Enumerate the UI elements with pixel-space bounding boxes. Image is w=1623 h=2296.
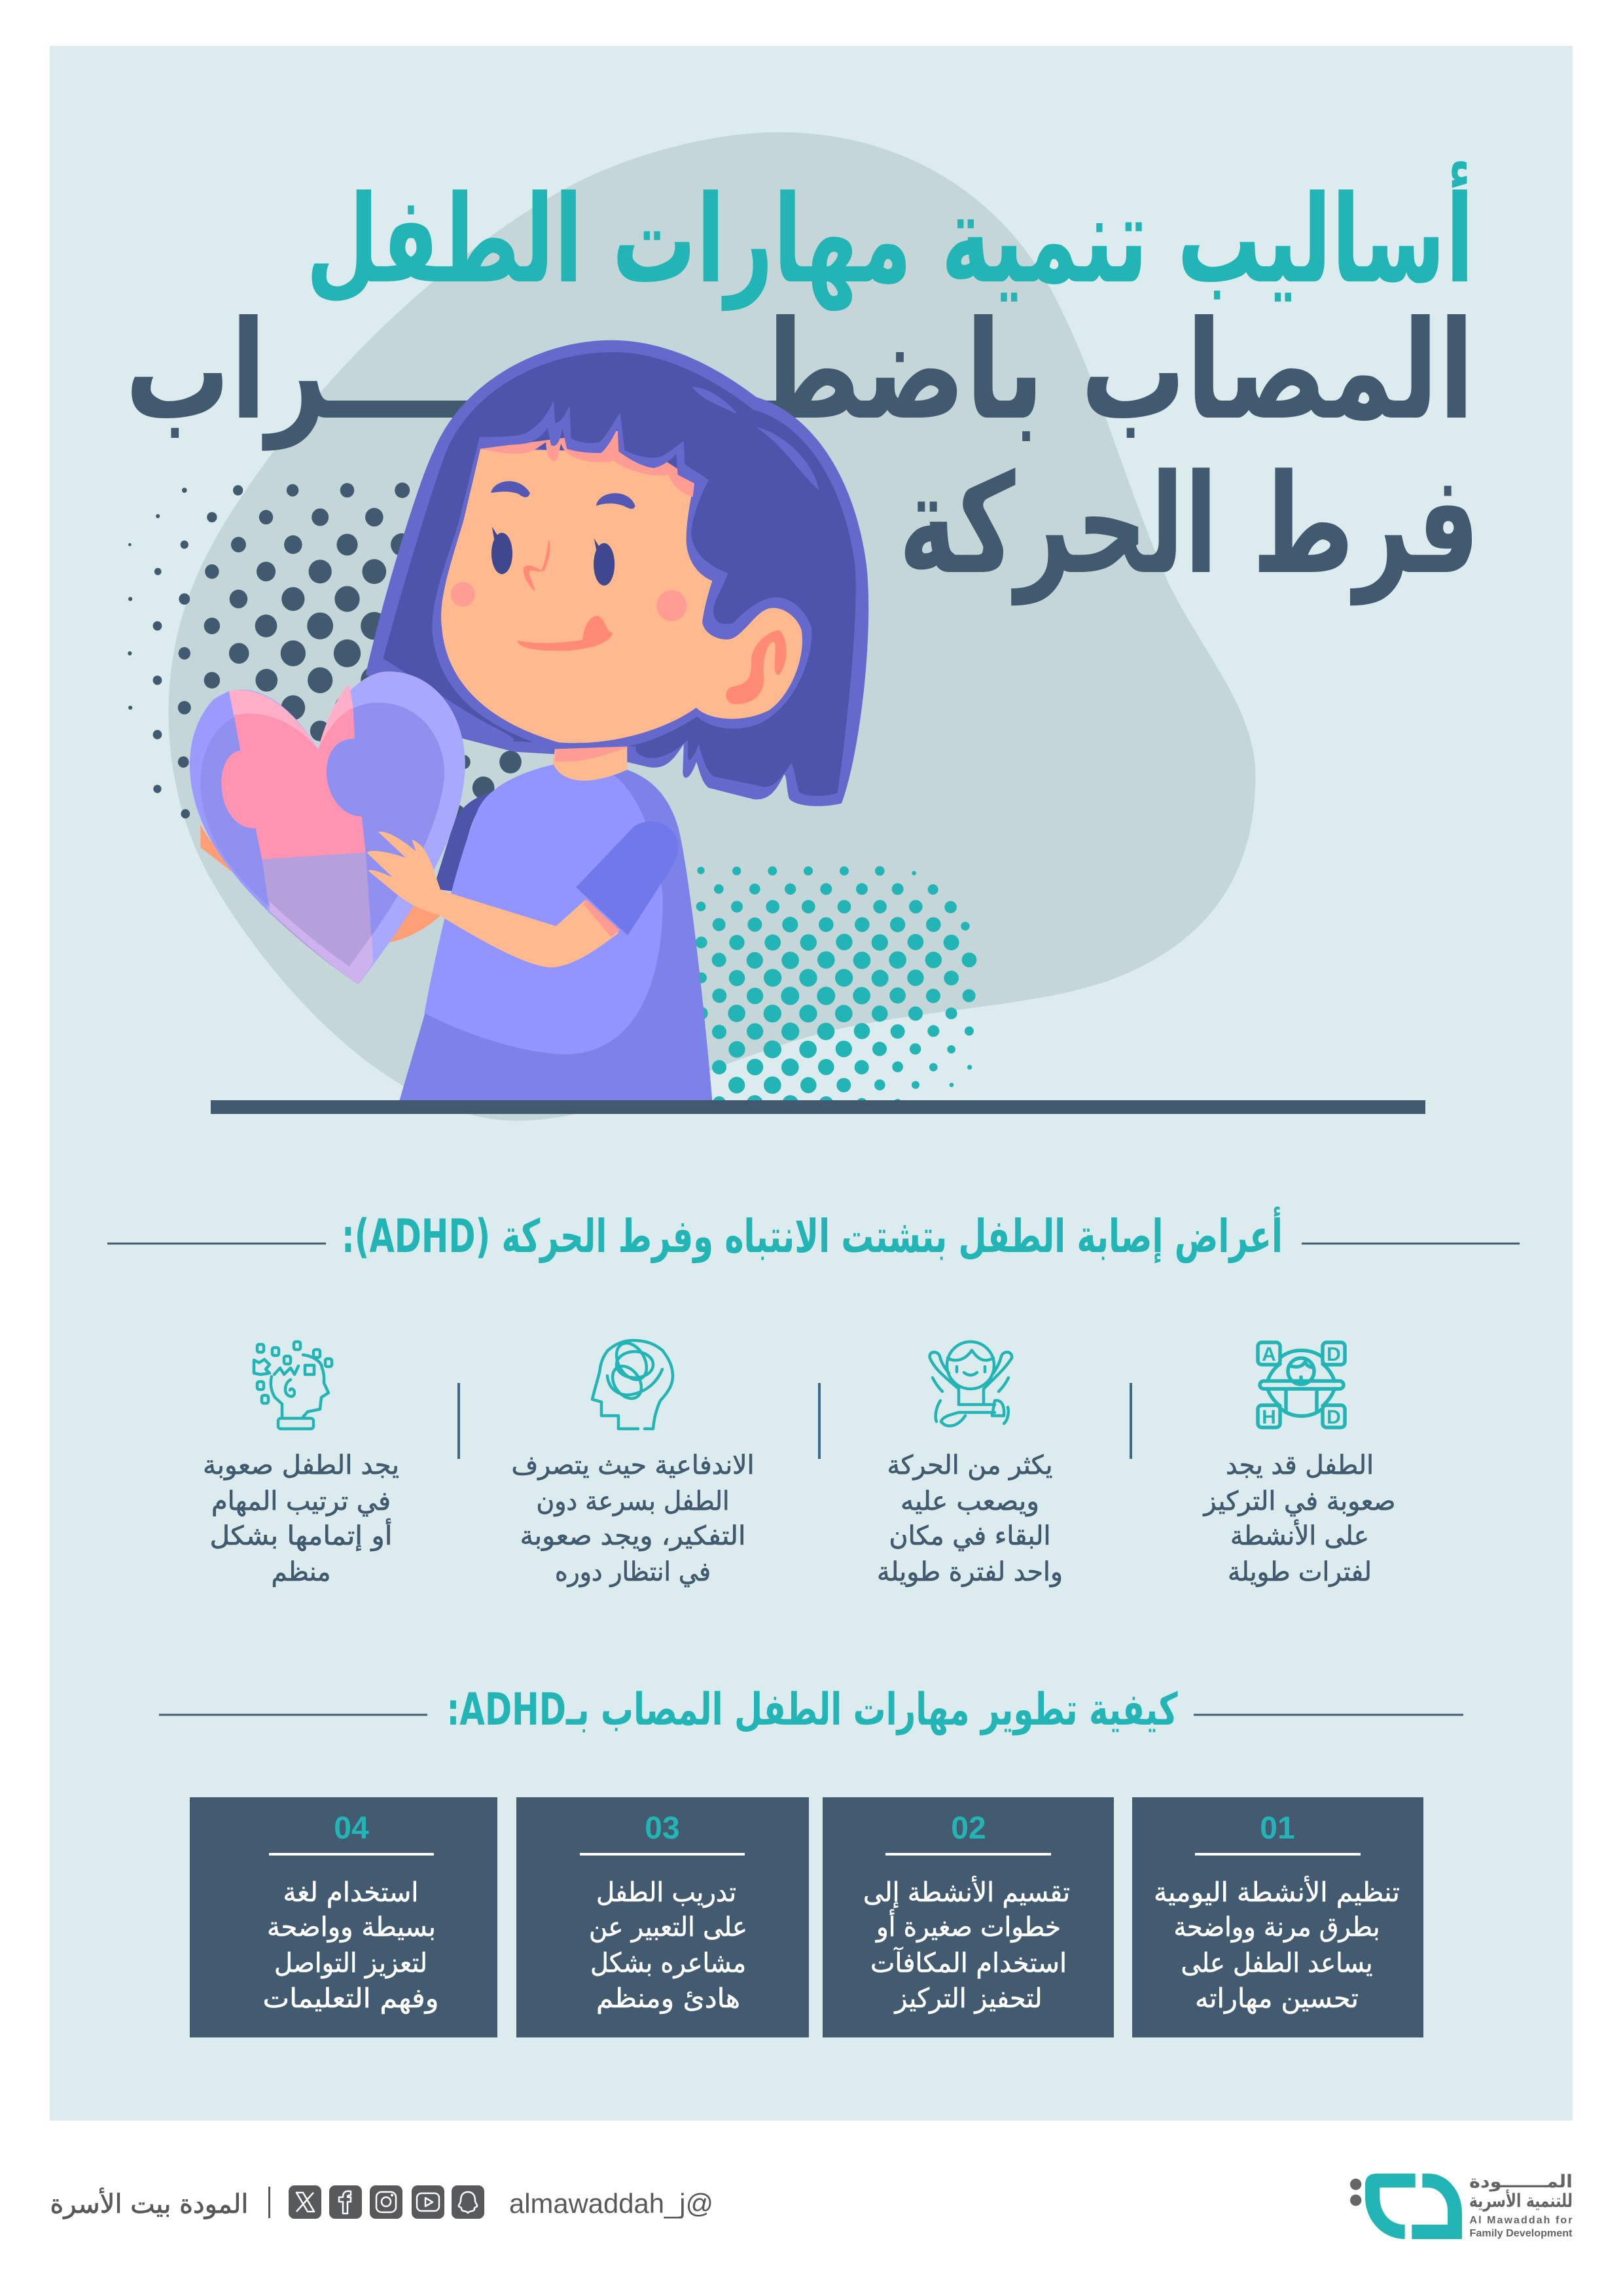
card 04: 04 (334, 1811, 369, 1846)
icon letters: D (1327, 1407, 1341, 1428)
fringe shadow (480, 431, 695, 497)
hair back (366, 340, 868, 806)
card 04: لتعزيز التواصل (274, 1947, 427, 1979)
symptom 2 text (877, 1450, 1063, 1587)
icon: instagram (370, 2185, 402, 2219)
card 02: استخدام المكافآت (870, 1946, 1067, 1979)
symptom 2 text: واحد لفترة طويلة (877, 1557, 1063, 1587)
card 04 (190, 1797, 497, 2037)
symptom 1 text: صعوبة في التركيز (1203, 1486, 1395, 1516)
card 02 (823, 1797, 1114, 2037)
icon: youtube (412, 2185, 444, 2219)
symptom 1 text: لفترات طويلة (1228, 1557, 1372, 1587)
card 02: تقسيم الأنشطة إلى (863, 1875, 1070, 1908)
card 01: 01 (1260, 1811, 1295, 1846)
symptom 2 text: يكثر من الحركة (887, 1450, 1052, 1480)
shirt (399, 764, 712, 1101)
card 03: 03 (645, 1811, 680, 1846)
icon: facebook (329, 2185, 362, 2219)
card 04: وفهم التعليمات (263, 1982, 438, 2014)
logo wordmark: للتنمية الأسرية (1469, 2189, 1573, 2212)
back hand (200, 824, 444, 943)
ground bar (211, 1100, 1425, 1114)
card 01: بطرق مرنة وواضحة (1174, 1911, 1380, 1943)
symptom 3 text: التفكير، ويجد صعوبة (520, 1521, 746, 1551)
nose (524, 539, 550, 591)
background blob (169, 132, 1255, 1121)
icon: head with scattered pieces (254, 1342, 332, 1429)
symptom 3 text: في انتظار دوره (555, 1557, 711, 1587)
card 03: هادئ ومنظم (596, 1982, 740, 2014)
logo wordmark (1469, 2172, 1573, 2239)
heart (190, 672, 465, 984)
mouth and tongue (518, 616, 613, 651)
card 01 (1132, 1797, 1423, 2037)
card 02: خطوات صغيرة أو (875, 1909, 1061, 1943)
symptom 4 text (203, 1450, 399, 1587)
symptom 4 text: منظم (271, 1557, 331, 1587)
divider (1130, 1383, 1132, 1459)
symptom 3 (512, 1338, 754, 1587)
card 01: يساعد الطفل على (1181, 1947, 1373, 1979)
logo wordmark: المـــــــودة (1469, 2172, 1573, 2192)
icon: jumping child (930, 1342, 1012, 1426)
face (441, 449, 802, 743)
sleeve (576, 821, 678, 935)
footer handle: almawaddah_j@ (509, 2188, 713, 2219)
icon letters: A (1262, 1344, 1276, 1365)
symptom 1 text: الطفل قد يجد (1226, 1450, 1374, 1480)
title (125, 161, 1480, 606)
heading: skills: كيفية تطوير مهارات الطفل المصاب بـADHD: (447, 1684, 1178, 1736)
card 04: بسيطة وواضحة (267, 1911, 436, 1943)
logo wordmark: Al Mawaddah for (1470, 2215, 1572, 2226)
shirt highlight (424, 764, 663, 1054)
card 01: تنظيم الأنشطة اليومية (1154, 1875, 1400, 1908)
icon letters: H (1262, 1407, 1276, 1428)
symptom 1 text: على الأنشطة (1230, 1519, 1369, 1551)
symptom 4 (203, 1342, 399, 1587)
ear inner (726, 630, 787, 704)
shirt back shoulder (433, 791, 493, 891)
card 03: مشاعره بشكل (590, 1947, 746, 1979)
face outline (432, 437, 812, 749)
arm and hand (366, 832, 618, 967)
symptom 4 text: في ترتيب المهام (211, 1486, 391, 1516)
icon letters: D (1327, 1344, 1341, 1365)
divider (818, 1383, 821, 1459)
elbow shadow (584, 899, 620, 937)
symptom 4 text: يجد الطفل صعوبة (203, 1450, 399, 1480)
symptom 3 text: الاندفاعية حيث يتصرف (512, 1450, 754, 1480)
social icons (289, 2185, 484, 2219)
fringe outline (480, 384, 731, 484)
logo (1350, 2172, 1573, 2239)
fringe (480, 379, 769, 482)
card 03 (516, 1797, 809, 2037)
illustration: girl holding puzzle heart (190, 340, 868, 1101)
symptom 4 text: أو إتمامها بشكل (209, 1518, 393, 1551)
eyebrows (491, 481, 635, 509)
icon: X (289, 2185, 321, 2219)
logo wordmark: Family Development (1470, 2228, 1573, 2239)
icon: head with tangled thoughts (592, 1338, 673, 1429)
halftone dots: teal (695, 866, 976, 1112)
symptom 1 (1203, 1342, 1395, 1587)
eyes (491, 526, 615, 586)
logo mark (1350, 2174, 1462, 2239)
icon letters (1262, 1344, 1341, 1428)
card 03: على التعبير عن (589, 1911, 747, 1943)
neck shadow (554, 739, 627, 762)
icon: ADHD globe (1258, 1342, 1345, 1427)
cheeks (451, 582, 687, 621)
footer slogan: المودة بيت الأسرة (50, 2187, 249, 2219)
heading: symptoms: أعراض إصابة الطفل بتشتت الانتباه وفرط الحركة (ADHD): (342, 1206, 1283, 1264)
halftone dots: dark (128, 482, 522, 823)
symptom 3 text: الطفل بسرعة دون (537, 1486, 729, 1516)
symptom 1 text (1203, 1450, 1395, 1587)
symptom 2 text: ويصعب عليه (901, 1486, 1039, 1516)
hair inner (383, 352, 856, 796)
card 02: لتحفيز التركيز (894, 1982, 1042, 2014)
symptom 3 text (512, 1450, 754, 1587)
symptom 2 text: البقاء في مكان (889, 1521, 1051, 1551)
card 03: تدريب الطفل (596, 1876, 736, 1908)
card 01: تحسين مهاراته (1195, 1982, 1359, 2014)
footer divider (268, 2187, 270, 2218)
hair highlights (692, 387, 819, 490)
icon: snapchat (452, 2185, 484, 2219)
divider (457, 1383, 460, 1459)
symptom 2 (877, 1342, 1063, 1587)
card 04: استخدام لغة (283, 1876, 419, 1908)
neck (552, 736, 627, 781)
card 02: 02 (951, 1811, 986, 1846)
